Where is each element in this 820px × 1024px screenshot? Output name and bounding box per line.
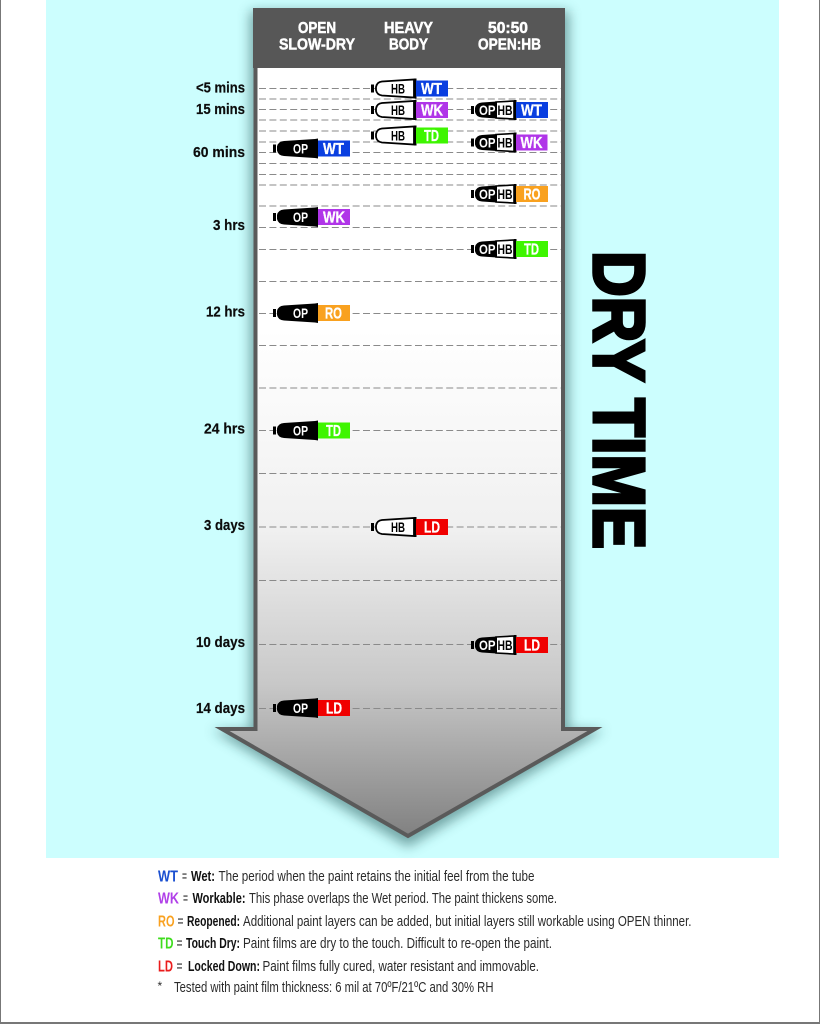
tube: 50:50 wet: OP <box>479 102 496 118</box>
tube: 50:50 workable: WK <box>520 135 543 152</box>
heading: 50:50 open:hb: OPEN:HB <box>478 36 541 54</box>
label: 3 days: 3 days <box>204 517 245 534</box>
tube: open wet: OP <box>293 140 308 156</box>
tube: heavy body wet: HB <box>391 80 405 96</box>
tube: 50:50 workable: HB <box>498 134 512 150</box>
tube: 50:50 workable <box>471 132 548 152</box>
heading: open slow-dry <box>279 20 355 54</box>
tube: open reopened: RO <box>325 306 342 323</box>
tube: heavy body touch dry: TD <box>424 128 439 145</box>
legend: wet: The period when the paint retains the initial feel from the tube <box>218 868 534 885</box>
tube: heavy body workable: WK <box>421 103 443 120</box>
heading: heavy body <box>384 20 433 54</box>
tube: open workable <box>273 207 350 227</box>
legend: locked down: Locked Down: <box>188 958 260 975</box>
tube: open touch dry: OP <box>293 422 308 438</box>
legend: workable <box>158 890 557 908</box>
tube: heavy body touch dry: HB <box>391 128 405 144</box>
tube: 50:50 reopened <box>471 184 548 204</box>
tube: heavy body workable: HB <box>391 102 405 118</box>
tube: heavy body touch dry <box>371 126 448 146</box>
tube: open wet: WT <box>323 141 344 158</box>
tube: heavy body wet <box>371 78 448 98</box>
label: 12 hrs: 12 hrs <box>206 304 245 320</box>
label: 14 days: 14 days <box>196 700 245 717</box>
cyan background panel <box>46 0 779 858</box>
heading: heavy body: HEAVY <box>384 20 433 37</box>
tube: 50:50 locked down: LD <box>524 638 540 655</box>
tube: heavy body wet: WT <box>421 81 442 98</box>
tube: heavy body locked down <box>371 517 448 537</box>
tube: 50:50 touch dry: TD <box>524 242 539 259</box>
tube: open workable: OP <box>293 209 308 225</box>
legend: reopened: RO <box>158 914 174 930</box>
legend: workable: = <box>183 890 188 907</box>
tube: 50:50 locked down: HB <box>498 637 512 653</box>
legend: wet: Wet: <box>191 868 215 885</box>
tube: 50:50 reopened: OP <box>479 186 496 202</box>
tube: 50:50 reopened: RO <box>524 187 540 204</box>
legend: locked down: LD <box>158 958 173 976</box>
label: 24 hrs: 24 hrs <box>204 420 245 438</box>
label: 10 days: 10 days <box>196 634 245 651</box>
legend: workable: Workable: <box>192 890 246 907</box>
legend: reopened <box>158 913 692 930</box>
legend: reopened: = <box>178 913 184 930</box>
legend: locked down: Paint films fully cured, water resistant and immovable. <box>262 958 539 975</box>
tube: 50:50 touch dry: OP <box>479 241 496 257</box>
legend: touch dry: = <box>176 935 183 952</box>
tube: open reopened: OP <box>293 305 308 321</box>
heading: 50:50 open:hb: 50:50 <box>488 20 528 37</box>
tube: open reopened <box>273 303 350 323</box>
footnote: * <box>158 979 162 993</box>
legend: reopened: Reopened: <box>187 913 240 930</box>
tube: open wet <box>273 138 350 158</box>
label: under 5 mins: <5 mins <box>196 80 245 96</box>
tube: 50:50 touch dry: HB <box>498 241 512 257</box>
legend: wet: = <box>182 868 187 885</box>
legend: touch dry: Touch Dry: <box>186 935 240 952</box>
arrow: dry time timeline <box>212 8 604 847</box>
tube: open locked down: OP <box>293 700 308 716</box>
title: dry time: DRY TIME <box>578 251 658 549</box>
footnote: Tested with paint film thickness: 6 mil at 70ºF/21ºC and 30% RH <box>174 979 494 996</box>
legend: locked down <box>158 958 539 976</box>
legend: touch dry <box>158 935 552 952</box>
tube: 50:50 touch dry <box>471 239 548 259</box>
legend: reopened: Additional paint layers can be added, but initial layers still workable using OPEN thinner. <box>243 913 692 930</box>
tube: heavy body locked down: HB <box>391 519 405 535</box>
heading: heavy body: BODY <box>389 36 428 54</box>
tube: 50:50 wet: HB <box>498 102 512 118</box>
tube: 50:50 wet: WT <box>521 103 542 120</box>
legend: workable: This phase overlaps the Wet period. The paint thickens some. <box>249 890 557 907</box>
time labels <box>193 80 245 717</box>
label: 3 hrs: 3 hrs <box>213 217 245 234</box>
legend: locked down: = <box>176 958 183 975</box>
tube: open locked down <box>273 698 350 718</box>
heading: open slow-dry: SLOW-DRY <box>279 36 355 54</box>
label: 15 mins: 15 mins <box>196 101 245 118</box>
tube: heavy body locked down: LD <box>424 520 440 537</box>
legend: workable: WK <box>158 890 179 908</box>
tube: open touch dry <box>273 420 350 440</box>
legend: wet <box>158 868 534 886</box>
legend <box>158 868 692 996</box>
column headings <box>279 20 541 54</box>
tube: open workable: WK <box>323 210 345 227</box>
legend: touch dry: TD <box>158 936 174 952</box>
legend: wet: WT <box>158 868 178 886</box>
tube: 50:50 wet <box>471 100 548 120</box>
heading: open slow-dry: OPEN <box>298 20 336 37</box>
tube: 50:50 locked down <box>471 635 548 655</box>
tube: 50:50 workable: OP <box>479 134 496 150</box>
legend: touch dry: Paint films are dry to the touch. Difficult to re-open the paint. <box>243 935 552 952</box>
heading: 50:50 open:hb <box>478 20 541 54</box>
tube: 50:50 locked down: OP <box>479 637 496 653</box>
tube: open locked down: LD <box>326 701 342 718</box>
tube: 50:50 reopened: HB <box>498 186 512 202</box>
label: 60 mins: 60 mins <box>193 144 245 161</box>
tube: heavy body workable <box>371 100 448 120</box>
tube: open touch dry: TD <box>326 423 341 440</box>
